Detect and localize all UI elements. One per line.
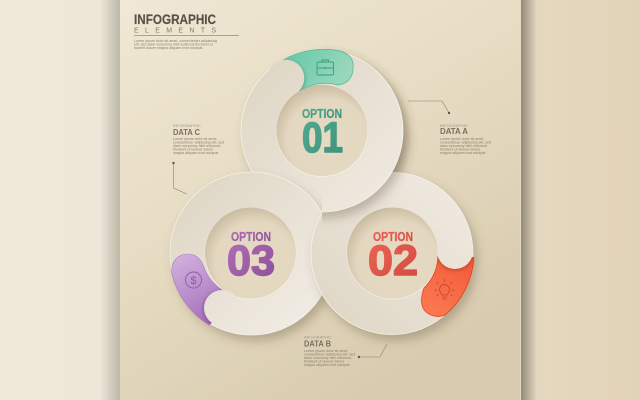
ring 01 overlap above ring 02 xyxy=(322,53,412,224)
title: infographic: INFOGRAPHIC xyxy=(134,12,216,27)
page shadow right xyxy=(521,0,537,400)
title rule xyxy=(134,34,239,37)
label: option 02 xyxy=(368,230,418,285)
body a: diam nonummy nibh euismod xyxy=(440,144,487,148)
left backdrop xyxy=(0,0,120,400)
title block xyxy=(134,12,239,50)
body a: Lorem ipsum dolor sit amet, xyxy=(440,137,484,141)
body c: diam nonummy nibh euismod xyxy=(173,144,220,148)
body b: tincidunt ut laoreet dolore xyxy=(304,360,344,364)
heading b: INFOGRAPHIC xyxy=(304,334,332,340)
callout: data b xyxy=(304,334,387,367)
ring 01 body xyxy=(241,50,403,212)
option word 01: OPTION xyxy=(302,107,342,121)
heading a: INFOGRAPHIC xyxy=(440,123,468,128)
icon: dollar coin xyxy=(186,272,202,288)
subtitle: elements: ELEMENTS xyxy=(134,28,216,34)
center disc right part xyxy=(276,85,368,176)
option word 03: OPTION xyxy=(231,230,271,244)
teal tab cap shadow xyxy=(288,60,306,91)
name c: DATA C xyxy=(173,127,200,137)
name b: DATA B xyxy=(304,338,331,348)
ring 02 body xyxy=(311,172,473,334)
ring 03 center disc xyxy=(205,208,296,298)
ring 02 center disc xyxy=(347,208,438,298)
main page panel xyxy=(120,0,520,400)
orange tab cap shadow xyxy=(438,257,474,272)
body b: diam nonummy nibh euismod xyxy=(304,356,351,360)
body c: magna aliquam erat volutpat. xyxy=(173,151,219,155)
ring 02 rounded end xyxy=(437,233,473,269)
number 01: 01 xyxy=(302,114,343,162)
purple tab cap shadow xyxy=(202,290,222,324)
title description: laoreet dolore magna aliquam erat volutpat. xyxy=(134,46,203,50)
label: option 01 xyxy=(302,107,343,162)
right backdrop xyxy=(520,0,640,400)
name a: DATA A xyxy=(440,126,468,136)
icon: briefcase xyxy=(317,60,334,75)
icon: dollar coin: $ xyxy=(190,275,197,287)
ring 03 rounded end xyxy=(204,290,240,326)
body c: consectetuer adipiscing elit, sed xyxy=(173,140,224,144)
page shadow left xyxy=(100,0,120,400)
option word 02: OPTION xyxy=(373,230,413,244)
body b: Lorem ipsum dolor sit amet, xyxy=(304,349,348,353)
body c: tincidunt ut laoreet dolore xyxy=(173,148,213,152)
teal tab xyxy=(280,49,353,91)
body a: magna aliquam erat volutpat. xyxy=(440,151,486,155)
body b: magna aliquam erat volutpat. xyxy=(304,363,350,367)
ring 03 body xyxy=(170,172,333,335)
body b: consectetuer adipiscing elit, sed xyxy=(304,352,355,356)
body c: Lorem ipsum dolor sit amet, xyxy=(173,137,217,141)
orange tab xyxy=(422,250,474,316)
ring: option 03 xyxy=(170,172,333,335)
leader a xyxy=(408,101,449,113)
icon: light bulb xyxy=(434,279,454,299)
number 03: 03 xyxy=(227,237,275,285)
purple tab xyxy=(172,254,228,325)
title description: Lorem ipsum dolor sit amet, consectetuer adipiscing xyxy=(134,39,217,43)
body a: consectetuer adipiscing elit, sed xyxy=(440,140,491,144)
ring 01 rounded end xyxy=(268,60,304,96)
ring 01 center disc xyxy=(276,85,368,176)
dot b xyxy=(358,356,360,358)
dot a xyxy=(448,112,450,114)
leader b xyxy=(359,344,387,357)
ring: option 01 xyxy=(241,49,403,212)
callout: data a xyxy=(408,101,491,155)
heading c: INFOGRAPHIC xyxy=(173,123,201,128)
title description: elit, sed diam nonummy nibh euismod tincidunt ut xyxy=(134,43,213,47)
callout: data c xyxy=(172,123,224,194)
label: option 03 xyxy=(227,230,275,285)
briefcase right part xyxy=(322,60,334,76)
body a: tincidunt ut laoreet dolore xyxy=(440,148,480,152)
number 02: 02 xyxy=(368,237,418,285)
leader c xyxy=(174,163,187,194)
dot c xyxy=(172,162,175,164)
ring: option 02 xyxy=(311,172,474,334)
teal tab right part xyxy=(322,49,354,86)
